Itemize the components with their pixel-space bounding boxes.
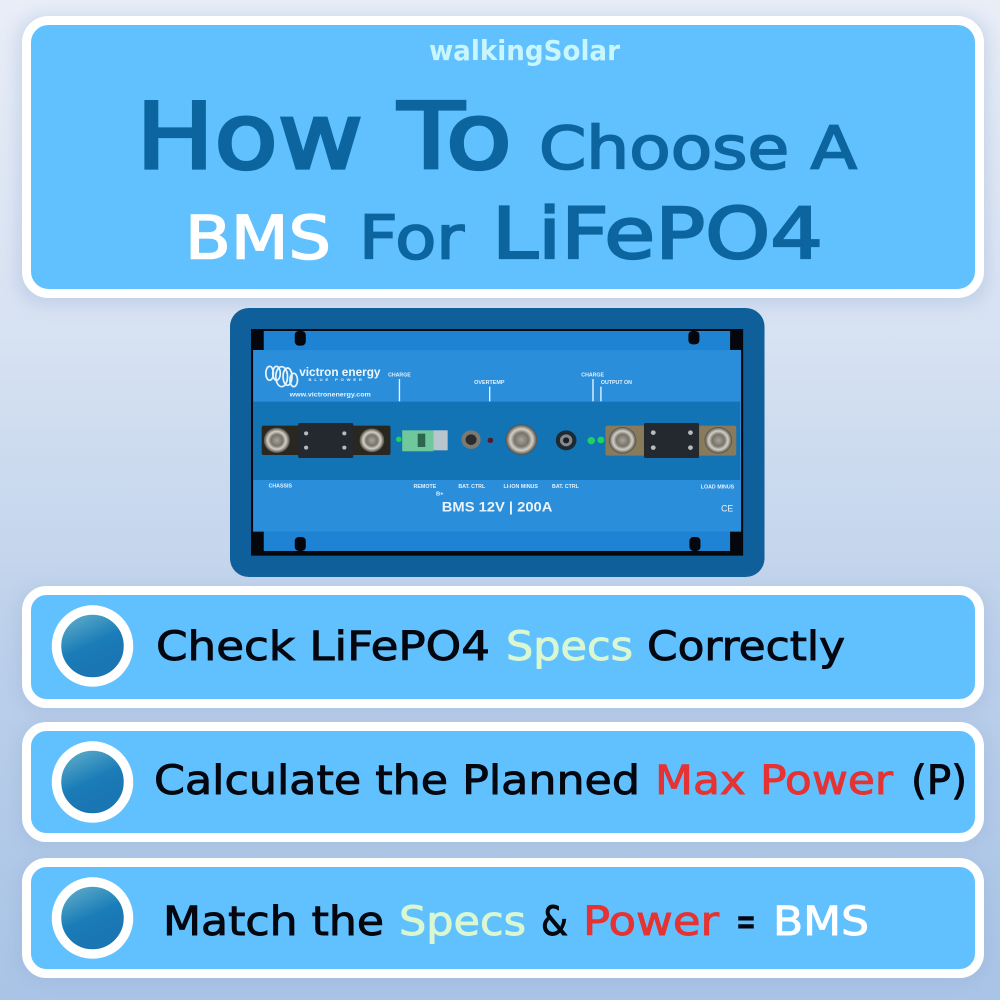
step 2 text: (P) [911, 758, 967, 804]
victron logo: BLUE POWER [309, 377, 362, 382]
bottom labels: REMOTE [414, 484, 437, 490]
panel: step 1 [18, 588, 988, 712]
title: line one: To [397, 85, 512, 190]
center connectors [396, 424, 604, 455]
panel: title header [18, 16, 988, 304]
step 1 text: Correctly [647, 624, 845, 670]
bottom labels: B+ [436, 491, 444, 497]
step 1 text: Check LiFePO4 [156, 624, 490, 670]
right busbar [605, 423, 736, 458]
icon: bullet circle 3 [56, 882, 128, 954]
step 2 text: Max Power [655, 758, 894, 804]
top labels: OVERTEMP [474, 380, 505, 386]
step 3 text: Power [583, 899, 720, 945]
left busbar [262, 423, 390, 458]
title: line two: For [359, 204, 464, 274]
bottom labels: BAT. CTRL [458, 484, 485, 490]
step 3 text: BMS [773, 899, 869, 945]
photo: Victron BMS device [230, 308, 765, 577]
title: line two: LiFePO4 [492, 193, 823, 275]
step 3 text: Match the [163, 899, 384, 945]
step 1 text [156, 624, 845, 670]
title: line two: BMS [185, 204, 331, 274]
device body [253, 350, 741, 532]
logo: walkingSolar: walkingSolar [429, 34, 620, 67]
panel: step 2 [18, 724, 988, 846]
step 2 text [154, 758, 967, 804]
title: line one: Choose A [539, 114, 857, 182]
step 3 text: & [541, 899, 568, 945]
icon: bullet circle 2 [56, 746, 128, 818]
top labels [388, 373, 632, 401]
icon: bullet circle 1 [56, 610, 128, 682]
step 1 text: Specs [506, 624, 633, 670]
title: line one: How [136, 85, 363, 190]
step 3 text: = [736, 899, 756, 945]
step 3 text [163, 899, 869, 945]
bottom labels: CHASSIS [269, 484, 293, 490]
step 2 text: Calculate the Planned [154, 758, 640, 804]
panel: step 3 [18, 860, 988, 982]
victron logo [266, 365, 381, 399]
top labels: CHARGE [388, 373, 411, 379]
top and bottom flanges [264, 331, 730, 551]
bottom labels: BAT. CTRL [552, 484, 579, 490]
bottom labels [269, 484, 735, 497]
bottom labels: LI-ION MINUS [503, 484, 539, 490]
top labels: OUTPUT ON [601, 380, 632, 386]
step 3 text: Specs [399, 899, 526, 945]
CE mark: CE [721, 504, 733, 515]
victron logo: www.victronenergy.com [288, 392, 372, 399]
title: line two [185, 193, 823, 275]
bottom labels: LOAD MINUS [701, 485, 735, 491]
victron logo: victron energy [299, 365, 381, 379]
top labels: CHARGE [581, 373, 605, 379]
title: line one [136, 85, 857, 190]
model label: BMS 12V | 200A [442, 500, 552, 516]
